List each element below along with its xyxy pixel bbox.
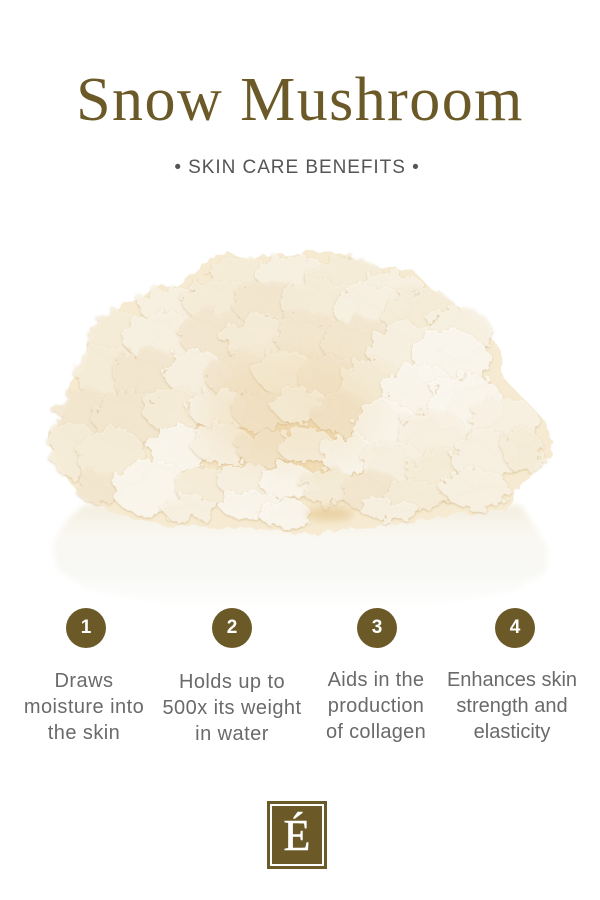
benefit 4 text: Enhances skin bbox=[447, 669, 577, 691]
benefit 1 text: the skin bbox=[48, 722, 120, 744]
benefit 3 text: Aids in the bbox=[328, 669, 424, 691]
benefit 4 text bbox=[447, 669, 577, 743]
benefit 2 text: Holds up to bbox=[179, 671, 285, 693]
reflection bbox=[52, 505, 548, 610]
benefit 2 text: in water bbox=[195, 723, 269, 745]
benefit 3 text bbox=[326, 669, 426, 743]
badge 4 bbox=[495, 608, 535, 648]
benefit 1 text: moisture into bbox=[24, 696, 144, 718]
benefit 2 text: 500x its weight bbox=[162, 697, 302, 719]
benefit 2 text bbox=[162, 671, 302, 745]
mushroom base silhouette bbox=[48, 252, 551, 535]
illustration: snow mushroom with reflection bbox=[46, 250, 554, 580]
benefit 4 text: strength and bbox=[456, 695, 568, 717]
badge 1 bbox=[66, 608, 106, 648]
base shadow bbox=[306, 507, 354, 521]
benefit 1 text: Draws bbox=[55, 670, 113, 692]
warm core shading over petals bbox=[205, 355, 375, 465]
benefit 1 text bbox=[24, 670, 144, 744]
mushroom petals bbox=[50, 256, 542, 528]
badge 3 bbox=[357, 608, 397, 648]
warm core shading under petals bbox=[190, 350, 410, 490]
badge 2: 2 bbox=[227, 617, 237, 638]
benefit 4 text: elasticity bbox=[474, 721, 550, 743]
logo: É bbox=[284, 811, 310, 860]
subtitle: • SKIN CARE BENEFITS • bbox=[174, 157, 420, 178]
badge 3: 3 bbox=[372, 617, 382, 638]
title: Snow Mushroom bbox=[76, 66, 524, 134]
badge 1: 1 bbox=[81, 617, 91, 638]
benefit 3 text: production bbox=[328, 695, 424, 717]
badge 4: 4 bbox=[510, 617, 520, 638]
logo bbox=[267, 801, 327, 869]
badge 2 bbox=[212, 608, 252, 648]
benefit 3 text: of collagen bbox=[326, 721, 426, 743]
